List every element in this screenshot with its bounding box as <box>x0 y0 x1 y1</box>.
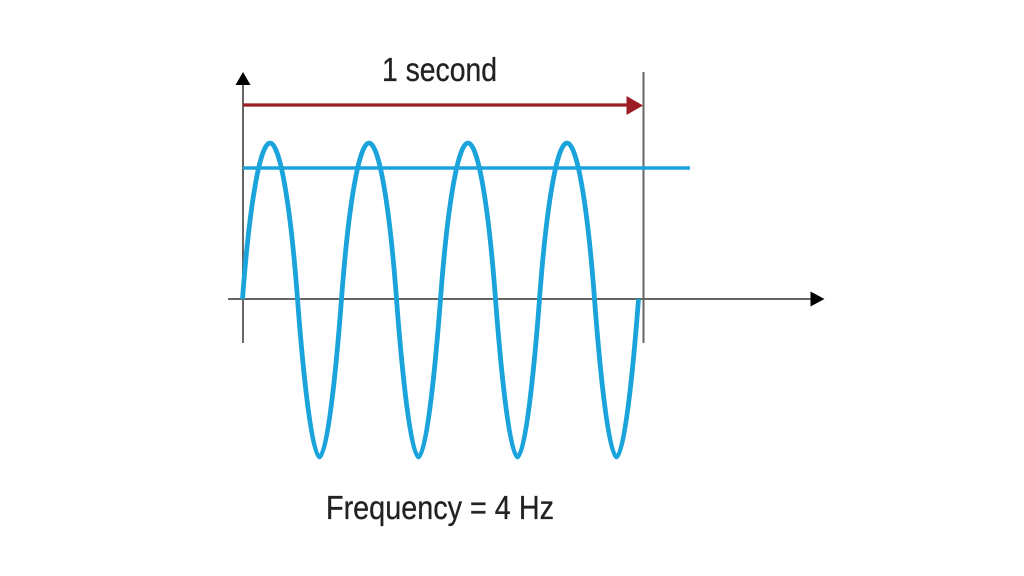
red one second arrow <box>243 96 643 115</box>
y axis with arrow <box>236 72 250 343</box>
label: 1 second: 1 second <box>382 51 497 88</box>
one second end marker <box>642 72 644 343</box>
x axis with arrow <box>228 292 824 306</box>
blue wave, 4 cycles <box>242 143 638 457</box>
horizontal blue level line <box>243 166 690 170</box>
label: frequency: Frequency = 4 Hz <box>326 489 554 526</box>
